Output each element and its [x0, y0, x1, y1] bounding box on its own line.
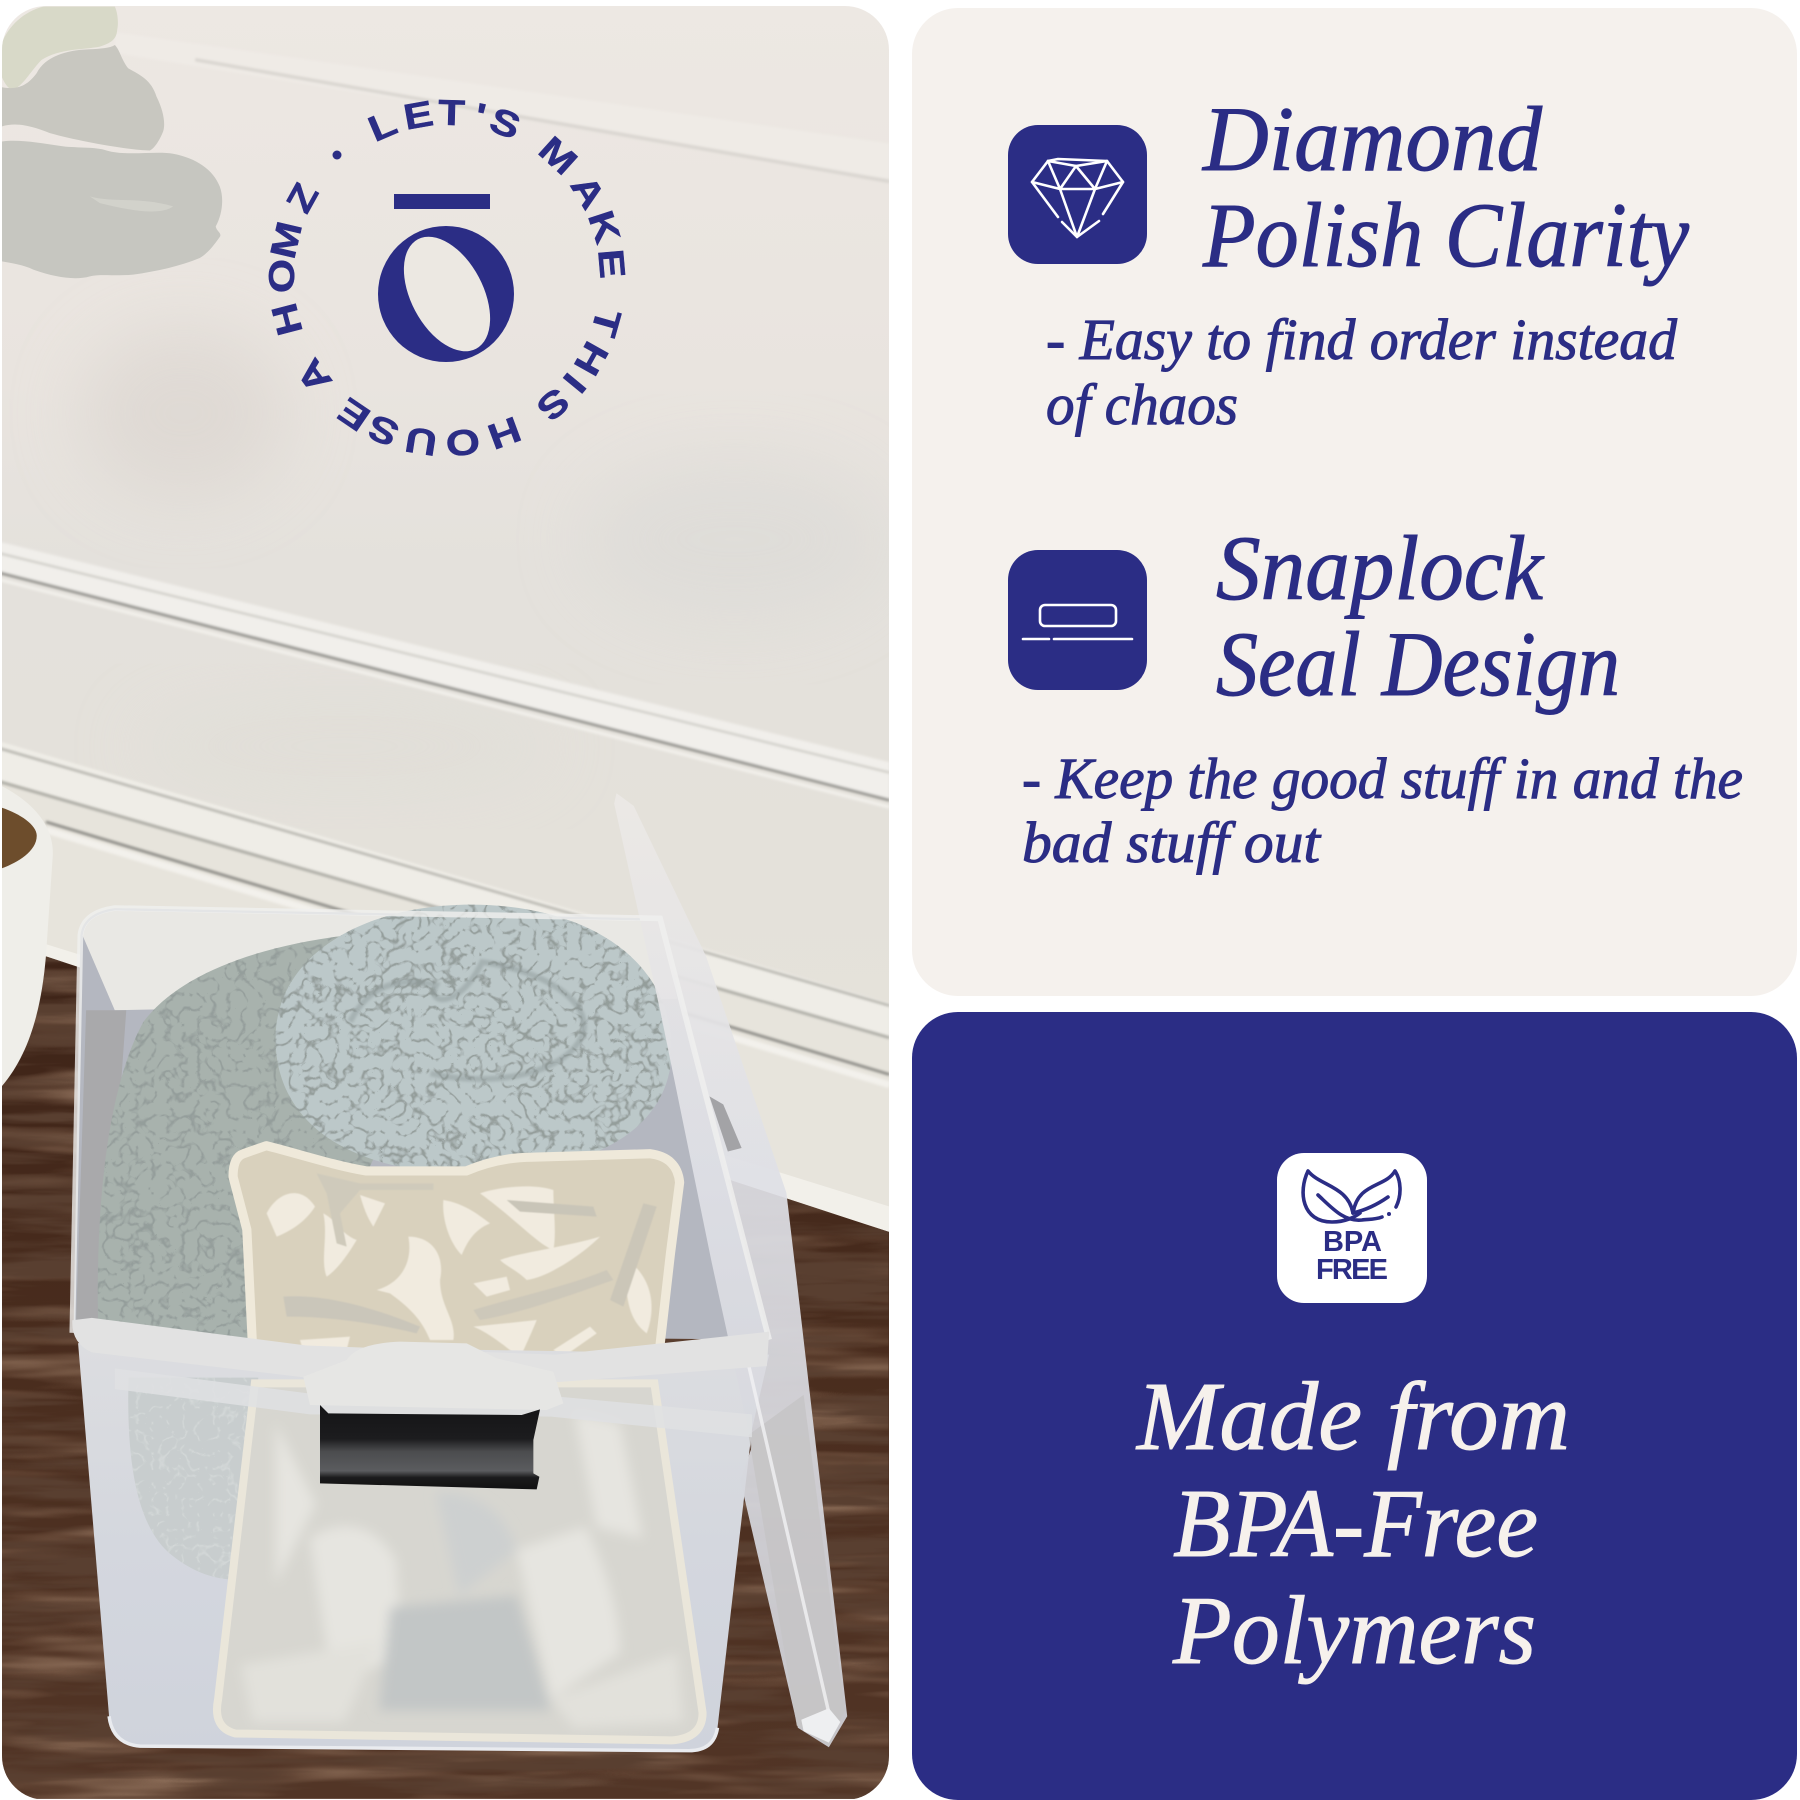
- panel: features: [912, 8, 1797, 996]
- pillow floral pattern: [267, 1173, 657, 1363]
- plant leaves: [2, 7, 222, 278]
- pillow lower part through box: [217, 1383, 703, 1740]
- wood floor: [0, 941, 890, 1799]
- circular slogan text: M: [531, 128, 585, 183]
- heading: Made from BPA-Free Polymers: Polymers: [1172, 1577, 1536, 1685]
- icon: BPA free leaves: BPA: [1323, 1226, 1382, 1258]
- circular slogan text: A: [288, 351, 340, 401]
- text: keep the good stuff: [1022, 746, 1743, 875]
- rolled blanket: [98, 905, 672, 1372]
- heading: Diamond Polish Clarity: [1201, 88, 1689, 286]
- heading: Diamond Polish Clarity: Diamond: [1201, 88, 1543, 190]
- circular slogan text: S: [529, 380, 577, 429]
- heading: Snaplock Seal Design: [1216, 517, 1620, 715]
- circular slogan text: I: [555, 365, 594, 401]
- panel: product photo: [0, 0, 890, 1799]
- logo bar: [394, 194, 490, 209]
- circular slogan text: E: [590, 247, 633, 280]
- circular slogan text: O: [444, 421, 482, 464]
- circular slogan text: [262, 92, 633, 464]
- box rim: [72, 908, 769, 1437]
- storage box back and interior: [73, 908, 769, 1340]
- chair rail moulding: [0, 542, 890, 807]
- icon: diamond: [1008, 125, 1147, 264]
- circular slogan text: Z: [278, 176, 327, 219]
- box front face: [78, 1343, 769, 1751]
- circular slogan text: ': [471, 95, 489, 137]
- heading: Diamond Polish Clarity: Polish Clarity: [1202, 184, 1689, 286]
- box handle and latch: [303, 1342, 563, 1489]
- text: easy to find order: - Easy to find order instead: [1046, 307, 1678, 372]
- blanket spiral fold: [350, 962, 584, 1079]
- circular slogan text: M: [262, 218, 310, 262]
- heading: Made from BPA-Free Polymers: Made from: [1135, 1363, 1570, 1471]
- blanket seen through box front: [128, 1378, 258, 1580]
- circular slogan text: S: [362, 406, 405, 455]
- pillow: [228, 1141, 684, 1352]
- circular slogan text: U: [402, 419, 440, 463]
- top wall moulding: [196, 58, 889, 183]
- heading: Snaplock Seal Design: Seal Design: [1216, 613, 1620, 715]
- circular slogan text: H: [566, 335, 616, 382]
- baseboard moulding: [0, 742, 890, 1234]
- text: easy to find order: [1046, 307, 1678, 437]
- heading: Made from BPA-Free Polymers: BPA-Free: [1173, 1470, 1538, 1578]
- logo ring mark: [378, 222, 514, 366]
- box bottom rim: [109, 1716, 718, 1751]
- text: keep the good stuff: bad stuff out: [1022, 810, 1322, 875]
- circular slogan text: E: [400, 93, 436, 138]
- icon: BPA free leaves: FREE: [1316, 1254, 1388, 1286]
- icon: snaplock seal: [1008, 550, 1147, 690]
- wall background: [2, 6, 889, 1003]
- circular slogan text: L: [362, 102, 403, 150]
- flower pot: [0, 785, 53, 1088]
- circular slogan text: T: [438, 92, 466, 134]
- text: keep the good stuff: - Keep the good stuff in and the: [1022, 746, 1743, 811]
- open lid: [614, 793, 847, 1747]
- icon: BPA free leaves: [1277, 1153, 1427, 1303]
- circular slogan text: O: [262, 259, 302, 293]
- circular slogan text: A: [562, 168, 613, 216]
- heading: Made from BPA-Free Polymers: [1135, 1363, 1570, 1685]
- circular slogan text: K: [580, 206, 628, 248]
- text: easy to find order: of chaos: [1046, 372, 1238, 437]
- heading: Snaplock Seal Design: Snaplock: [1216, 517, 1545, 619]
- panel: BPA free: [912, 1012, 1797, 1800]
- circular slogan text: T: [583, 304, 629, 342]
- circular slogan text: H: [264, 299, 311, 340]
- circular slogan text: S: [484, 99, 526, 147]
- lid hinge tip: [801, 1708, 840, 1743]
- circular slogan text: E: [330, 389, 377, 439]
- logo badge: [262, 92, 633, 464]
- circular slogan text: H: [482, 408, 526, 457]
